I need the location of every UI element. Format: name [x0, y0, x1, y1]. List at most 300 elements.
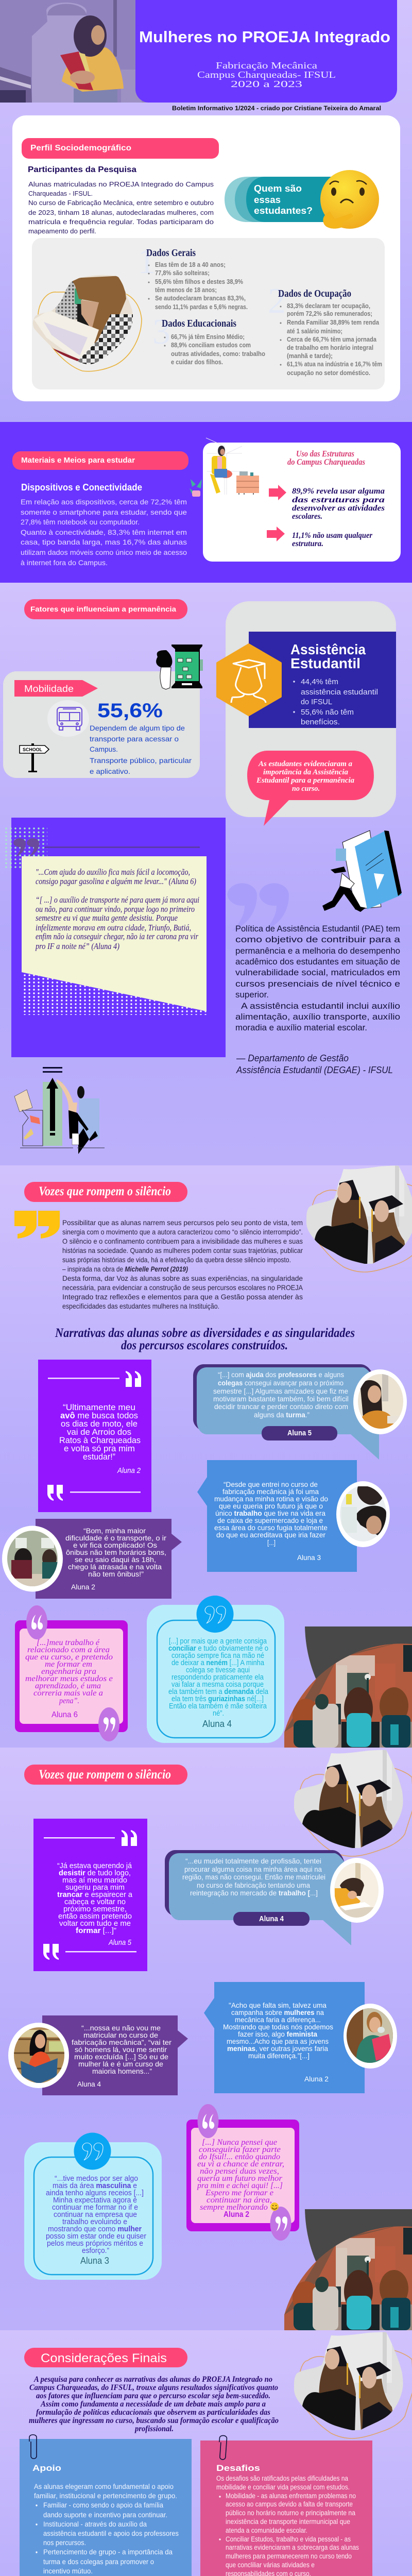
stat: uses structures: escolares.: [292, 512, 322, 521]
stat: 55,6%: 55,6%: [97, 700, 163, 722]
card: support: [20, 2435, 192, 2576]
quote card: Aluna 5 quitting: mas aí meu marido: [62, 1876, 127, 1885]
mobility text: e aplicativo.: [90, 767, 130, 775]
mobility text: Campus.: [90, 745, 118, 753]
heading: voices that break the silence: Vozes que rompem o silêncio: [39, 1184, 171, 1198]
navy panel: Estudantil: [290, 655, 360, 671]
text: conclusion: [29, 2375, 279, 2433]
quote card: Aluna 4 child care: [...] por mais que a gente consiga: [169, 1637, 267, 1646]
general data: têm menos de 18 anos;: [155, 286, 217, 294]
speech box: Aluna 3: fabricação mecânica já foi uma: [222, 1487, 319, 1496]
speech box: Aluna 3: único trabalho que tive na vida era: [215, 1509, 325, 1517]
speech bubble: Aluna 4 career: procurar alguma coisa na minha área aqui na: [184, 1865, 322, 1873]
icon: paperclip: [218, 2435, 227, 2460]
speech bubble: As estudantes evidenciaram a: [258, 760, 352, 768]
icon: bus: [47, 700, 89, 737]
heading: narratives: dos percursos escolares construídos.: [121, 1338, 288, 1352]
speech box: Aluna 3: Aluna 3: [297, 1553, 321, 1562]
speech box: Aluna 4 enrolment: mulher lá e é um curso de: [78, 2060, 163, 2068]
educational data: [162, 318, 265, 366]
icon: yellow quote mark: [14, 1211, 60, 1239]
quote card: Aluna 2 grandfather: os dias de moto, ele: [61, 1419, 138, 1429]
heading pill: Perfil Sociodemográfico: [30, 144, 131, 152]
card: use of campus structures: [203, 438, 401, 562]
text: breaking the silence: O silêncio e o confinamento contribuem para a invisibilidade das mulheres e suas: [62, 1237, 303, 1245]
speech box: Aluna 2 transport: [2, 1519, 182, 1599]
quote card: Aluna 4 child care: né”.: [213, 1709, 224, 1718]
speech box: Aluna 2 transport: Aluna 2: [71, 1583, 95, 1591]
general data: Dados Gerais: [146, 247, 196, 259]
devices text: Quanto à conectividade, 83,3% têm internet em: [21, 528, 187, 536]
card: student assistance: [217, 601, 396, 826]
general data: Se autodeclaram brancas 83,3%,: [155, 294, 246, 302]
card text: dando suporte e incentivo para continuar.: [43, 2511, 167, 2519]
card text: Familiar - como sendo o apoio da família: [43, 2501, 163, 2509]
quote card: Aluna 3 fears: “...tive medos por ser algo: [55, 2174, 138, 2183]
quote card: Aluna 3 fears: Minha expectativa agora é: [53, 2196, 137, 2205]
speech box: Aluna 3: que eu queria pro futuro já que o: [219, 1502, 323, 1510]
icon: thinking emoji: [320, 170, 379, 229]
speech bubble: Aluna 4 career: no curso de fabricação tentando uma: [197, 1881, 310, 1889]
stat: does not use: 11,1% não usam qualquer: [292, 531, 373, 540]
quote card: Aluna 2 IFSul: pra mim e achei aqui! [...]: [197, 2181, 283, 2190]
devices text: [21, 498, 187, 567]
quote card: Aluna 6: [15, 1605, 128, 1741]
icon: smiley: [270, 2202, 279, 2211]
speech box: Aluna 3: do que eu acreditava que iria fazer: [216, 1531, 325, 1539]
card text: acesso ao campus devido a falta de transporte: [226, 2500, 353, 2508]
quote card: Aluna 2 grandfather: Ratos à Charqueadas: [59, 1435, 141, 1445]
ghost numerals: 2: [268, 281, 286, 321]
speech box: Aluna 3: mudança na minha rotina e visão do: [214, 1495, 328, 1503]
quote card: Aluna 3 fears: trabalho evoluindo e: [62, 2217, 127, 2226]
stat: uses structures: desenvolver as atividades: [292, 504, 385, 513]
quote card: Aluna 6: relacionado com a área: [27, 1646, 110, 1654]
avatar photo: [330, 1858, 384, 1923]
quote card: Aluna 4 child care: ela tem três guriazinhas né[...]: [171, 1694, 264, 1703]
heading: factors: [24, 599, 187, 619]
text: breaking the silence: histórias na sociedade. Quando as mulheres podem contar suas trajetórias, publicar: [62, 1246, 303, 1255]
speech box: Aluna 2 campaign: meninas, ver outras jovens faria: [227, 2044, 328, 2053]
callout: who are these students: [225, 177, 331, 222]
attribution: — Departamento de Gestão: [236, 1053, 349, 1063]
card text: Mobilidade - as alunas enfrentam problemas no: [226, 2492, 356, 2500]
panel: materials and means: [12, 438, 401, 567]
icon: plant: [190, 479, 202, 497]
card title: do Campus Charqueadas: [287, 457, 365, 467]
quote card: Aluna 5 quitting: Aluna 5: [108, 1938, 132, 1947]
card text: nos percursos.: [43, 2538, 86, 2547]
panel: sociodemographic profile: [12, 115, 400, 401]
quote text: infelizmente morava em outra cidade, Triunfo, Butiá,: [36, 923, 191, 933]
participants text: No curso de Fabricação Mecânica, entre setembro e outubro: [28, 199, 214, 207]
quote card: Aluna 2 IFSul: não pensei duas vezes,: [200, 2167, 279, 2176]
quote card: Aluna 3 fears: [24, 2133, 162, 2280]
educational data: 66,7% já têm Ensino Médio;: [171, 333, 245, 341]
occupation data: porém 72,2% são remunerados;: [287, 310, 372, 317]
text: student assistance policy: superior.: [235, 990, 269, 999]
speech box: Aluna 4 enrolment: “...nossa eu não vou me: [81, 2024, 161, 2032]
participants text: mapeamento do perfil.: [28, 227, 96, 235]
quote card: Aluna 4 child care: Aluna 4: [202, 1719, 232, 1729]
text: student assistance policy: moradia e auxílio material escolar.: [235, 1023, 367, 1032]
devices text: utilizam dados móveis como único meio de acesso: [21, 548, 187, 556]
speech box: Aluna 2 campaign: [204, 1982, 397, 2093]
quote card: Aluna 4 child care: coração sempre fica na mão né: [171, 1651, 264, 1660]
icon: paperclip: [29, 2435, 37, 2459]
ghost numerals: [138, 242, 286, 352]
quote card: Aluna 2 IFSul: [186, 2104, 299, 2241]
educational data: outras atividades, como: trabalho: [171, 350, 265, 358]
quote text: alguns da turma.”: [254, 1411, 310, 1419]
quote card: Aluna 2 grandfather: estudar!”: [83, 1452, 115, 1462]
occupation data: Dados de Ocupação: [278, 288, 351, 299]
mobility text: Transporte público, particular: [90, 756, 192, 765]
heading: final considerations: [24, 2348, 187, 2367]
text: conclusion: Campus Charqueadas, do IFSUL, trouxe alguns resultados significativos quanto: [29, 2383, 278, 2392]
quote card: Aluna 2 grandfather: Aluna 2: [117, 1466, 141, 1475]
general data: 55,6% têm filhos e destes 38,9%: [155, 278, 243, 285]
text: breaking the silence: especificidades das estudantes mulheres na Instituição.: [62, 1302, 219, 1310]
text: conclusion: formulação de políticas educacionais que observem as particularidades das: [36, 2408, 270, 2417]
speech box: Aluna 2 transport: ônibus não tem horários bons,: [66, 1548, 166, 1556]
card text: narrativas evidenciaram a sobrecarga das alunas: [226, 2544, 359, 2551]
text: breaking the silence: Integrado traz reflexões e elementos para que a Gestão possa atender às: [62, 1293, 303, 1301]
photo: students on campus: [283, 2209, 412, 2330]
text: student assistance policy: Política de Assistência Estudantil (PAE) tem: [235, 924, 400, 934]
quote card: Aluna 3 fears: mais da área masculina e: [53, 2181, 137, 2190]
mobility text: Dependem de algum tipo de: [90, 724, 185, 732]
quote text: motivaram bastante também, foi bem difícil: [213, 1395, 349, 1403]
heading: narratives: [55, 1326, 355, 1352]
quote card: Aluna 6: me formar em: [45, 1660, 92, 1669]
occupation data: até 1 salário mínimo;: [287, 327, 342, 335]
speech box: Aluna 2 campaign: campanha sobre mulheres na: [231, 2008, 324, 2016]
quote card: Aluna 2 IFSul: queria um futuro melhor: [197, 2174, 283, 2183]
card text: Institucional - através do auxílio da: [43, 2520, 147, 2528]
card: challenges: [200, 2435, 372, 2576]
attribution: Assistência Estudantil (DEGAE) - IFSUL: [236, 1065, 393, 1075]
photo: graduates: [293, 1749, 412, 1856]
icon: hexagon with graduate: [217, 645, 281, 715]
card text: atenda a comunidade escolar.: [226, 2527, 307, 2534]
speech bubble: importância da Assistência: [263, 768, 348, 776]
quote text: [213, 1370, 349, 1419]
speech bubble: Estudantil para a permanência: [256, 776, 354, 785]
quote card: Aluna 4 child care: Então ela também é mãe solteira: [169, 1702, 267, 1710]
subtitle: Campus Charqueadas- IFSUL: [197, 70, 336, 80]
name pill: [233, 1912, 310, 1926]
avatar photo: [353, 1369, 407, 1434]
navy panel: [249, 632, 396, 728]
participants text: [28, 180, 214, 235]
card title: Uso das Estruturas: [296, 449, 354, 459]
general data: Elas têm de 18 a 40 anos;: [155, 261, 226, 268]
quote card: Aluna 4 child care: conciliar e tudo obviamente né o: [168, 1644, 268, 1653]
quote card: Aluna 2 IFSul: [...] Nunca pensei que: [202, 2138, 277, 2147]
speech box: Aluna 2 transport: “Bom, minha maior: [83, 1527, 146, 1535]
photo: graduates: [305, 1165, 412, 1272]
speech box: Aluna 2 campaign: "Acho que falta sim, talvez uma: [229, 2001, 327, 2009]
illustration: woman with giant book: [322, 831, 402, 912]
quote card: Aluna 2 IFSul: Espero me formar e: [205, 2189, 273, 2197]
illustration: woman and upward arrow: [14, 1067, 105, 1154]
participants heading: Participantes da Pesquisa: [28, 165, 136, 174]
text: breaking the silence: – inspirada na obra de Michelle Perrot (2019): [62, 1265, 188, 1273]
quote card: Aluna 2 IFSul: Aluna 2: [224, 2210, 249, 2219]
icon: school sign: SCHOOL: [23, 747, 42, 752]
card text: [34, 2482, 179, 2575]
quote card: Aluna 2 grandfather: e volta só pra mim: [64, 1444, 135, 1453]
quote card: Aluna 5 quitting: sugeriu para mim: [65, 1883, 125, 1892]
quote card: Aluna 4 child care: vai falar a mesma coisa porque: [171, 1680, 264, 1689]
devices text: somente o smartphone para estudar, sendo que: [21, 508, 187, 516]
arrow: [267, 527, 285, 541]
navy panel: assistência estudantil: [301, 688, 378, 697]
quote text: colegas consegui avançar para o próximo: [218, 1379, 344, 1387]
name pill: [262, 1426, 337, 1440]
card text: incentivo mútuo.: [43, 2567, 93, 2575]
speech box: Aluna 3: essa área do curso fugia totalmente: [214, 1523, 328, 1532]
quote card: Aluna 3 fears: esforço.”: [82, 2246, 109, 2255]
quote card: Aluna 6: pena”.: [59, 1697, 79, 1705]
subtitle: 2020 a 2023: [231, 79, 302, 89]
card heading: Apoio: [32, 2463, 61, 2473]
text: breaking the silence: suas próprias histórias de vida, há a efetivação da quebra desse silêncio imposto.: [62, 1256, 291, 1264]
attribution: [236, 1053, 393, 1075]
quote card: Aluna 6: [...]meu trabalho é: [37, 1638, 100, 1647]
card text: que concliliar várias atividades e: [226, 2561, 315, 2569]
byline: Boletim Informativo 1/2024 - criado por Cristiane Teixeira do Amaral: [172, 105, 381, 112]
quote card: Aluna 5 quitting: voltar com tudo e me: [59, 1919, 131, 1928]
stat: uses structures: das estruturas para: [292, 496, 385, 504]
card text: mobilidade e conciliar vida pessoal com estudos.: [216, 2483, 350, 2491]
quote text: ou não, para continuar vindo, porque logo no primeiro: [36, 904, 195, 914]
speech box: Aluna 2 transport: não tem ônibus!”: [88, 1570, 144, 1578]
speech box: Aluna 2 campaign: fazer isso, algo feminista: [238, 2030, 317, 2038]
title banner: [135, 0, 397, 103]
heading: voices that break the silence: [24, 1182, 187, 1202]
speech box: Aluna 3: [197, 1460, 390, 1572]
quote card: Aluna 5 quitting: [33, 1819, 147, 1971]
card title: [287, 449, 365, 467]
speech box: Aluna 2 campaign: mesmo...Acho que para as jovens: [227, 2037, 329, 2045]
title: Mulheres no PROEJA Integrado: [139, 28, 390, 46]
card text: [216, 2475, 359, 2576]
speech box: Aluna 4 enrolment: [8, 2015, 188, 2095]
heading: factors: Fatores que influenciam a permanência: [30, 605, 176, 613]
heading: voices that break the silence: Vozes que rompem o silêncio: [39, 1768, 171, 1782]
quote card: Aluna 2 grandfather: avô me busca todos: [60, 1411, 138, 1420]
quote card: Aluna 3 fears: continuar me formar no if e: [52, 2203, 138, 2212]
occupation data: Cerca de 66,7% têm uma jornada: [287, 335, 377, 343]
callout: who are these students: estudantes?: [254, 206, 313, 216]
heading: final considerations: Considerações Finais: [41, 2351, 167, 2365]
quote card: Aluna 5 quitting: “Já estava querendo já: [57, 1861, 132, 1870]
text: breaking the silence: necessária, para evidenciar a construção de seus percursos escolares no PROEJA: [62, 1283, 303, 1292]
quote card: Aluna 6: engenharia pra: [41, 1667, 96, 1676]
quote text: semestre eu vi que muita gente desistiu. Porque: [36, 913, 178, 923]
quote card: Aluna 3 fears: posso sim estar onde eu quiser: [46, 2232, 146, 2241]
card text: As alunas elegeram como fundamental o apoio: [34, 2482, 174, 2490]
card: mobility: [3, 671, 200, 778]
speech box: Aluna 2 transport: se eu saio daqui às 18h,: [75, 1555, 156, 1564]
devices text: 27,8% têm notebook ou computador.: [21, 518, 140, 526]
quote text: “[...] com ajuda dos professores e alguns: [218, 1370, 344, 1379]
text: breaking the silence: [62, 1218, 303, 1310]
devices text: casa, tipo banda larga, mas 16,7% das alunas: [21, 538, 187, 546]
educational data: Dados Educacionais: [162, 318, 236, 329]
quote text: “[ ...] o auxílio de transporte né para quem já mora aqui: [36, 895, 199, 905]
quote card: Aluna 4 child care: [147, 1596, 284, 1743]
quote card: Aluna 6: correria mais vale a: [33, 1689, 103, 1698]
card text: Os desafios são ratificados pelas dificuldades na: [216, 2475, 348, 2482]
speech bubble: Aluna 4 career: [165, 1850, 384, 1945]
quote card: Aluna 4 child care: ela também tem a demanda dela: [168, 1687, 269, 1696]
quote card: Aluna 4 child care: de deixar a neném [...] A minha: [171, 1658, 265, 1667]
stat: does not use: [292, 531, 373, 548]
quote card: Aluna 2 grandfather: vai de Arroio dos: [67, 1427, 131, 1437]
devices text: à internet fora do Campus.: [21, 558, 108, 567]
speech bubble: Aluna 4 career: reintegração no mercado de trabalho [...]: [190, 1889, 318, 1897]
text: conclusion: Assim como fundamenta a necessidade de um debate mais amplo para a: [40, 2400, 266, 2409]
speech bubble: no curso.: [292, 785, 320, 793]
speech box: Aluna 4 enrolment: muito excluída [...] Só eu de: [74, 2053, 168, 2061]
speech box: Aluna 2 campaign: mecânica faria a diferença...: [235, 2015, 321, 2024]
avatar photo: [344, 2004, 397, 2069]
stat: does not use: estrutura.: [292, 539, 323, 548]
quote card: Aluna 5 quitting: então assim pretendo: [58, 1912, 132, 1921]
speech box: Aluna 2 campaign: Aluna 2: [304, 2075, 329, 2083]
participants text: matrícula e frequência regular. Todas participaram do: [28, 218, 214, 226]
photo: graduates: [293, 2331, 412, 2438]
text: student assistance policy: permanência e a melhoria do desempenho: [235, 946, 400, 956]
text: student assistance policy: vulnerabilidade social, matriculados em: [235, 968, 400, 977]
occupation data: 61,1% atua na indústria e 16,7% têm: [287, 360, 382, 368]
quote card: Aluna 6: melhorar meus estudos e: [25, 1674, 113, 1683]
text: breaking the silence: Possibilitar que as alunas narrem seus percursos pelo seu ponto de vista, tem: [62, 1218, 303, 1227]
general data: 77,8% são solteiras;: [155, 269, 210, 277]
card text: familiar, institucional e pertencimento de grupo.: [34, 2492, 177, 2500]
quote card: Aluna 3 fears: Aluna 3: [80, 2256, 109, 2266]
arrow: [269, 485, 286, 500]
speech bubble: Aluna 5: [193, 1364, 407, 1460]
text: breaking the silence: Desta forma, dar Voz às alunas sobre as suas experiências, na singularidade: [62, 1274, 303, 1282]
text: student assistance policy: cursos presenciais de nível técnico e: [235, 979, 400, 989]
speech box: Aluna 3: [...]: [267, 1538, 276, 1547]
quote text: "...Com ajuda do auxílio fica mais fácil a locomoção,: [36, 867, 190, 877]
photo: student reading: [31, 273, 142, 371]
icon: school sign: [20, 743, 49, 772]
speech box: Aluna 2 campaign: muita diferença.”[...]: [248, 2052, 310, 2060]
quote card: Aluna 3 fears: ainda tenho alguns receios [...]: [46, 2189, 144, 2197]
quote card: Aluna 2 IFSul: continuar na área,: [207, 2196, 272, 2205]
panel: student quotes on transport: [5, 818, 226, 1057]
speech box: Aluna 4 enrolment: só homens lá, vou me sentir: [75, 2045, 167, 2054]
subtitle: [197, 60, 336, 89]
ghost numerals: 1: [138, 242, 156, 281]
quote card: Aluna 6: aprendizado, é uma: [35, 1682, 101, 1690]
stat: uses structures: 89,9% revela usar alguma: [292, 487, 385, 496]
heading: narratives: Narrativas das alunas sobre as diversidades e as singularidades: [55, 1326, 355, 1340]
navy panel: Assistência: [290, 641, 366, 657]
speech bubble: Aluna 4 career: “...eu mudei totalmente de profissão, tentei: [185, 1857, 321, 1865]
occupation data: de trabalho em horário integral: [287, 344, 373, 351]
navy panel: do IFSUL: [301, 698, 332, 706]
card text: inexistência de transporte intermunicipal que: [226, 2518, 350, 2526]
speech box: Aluna 2 transport: e vir fica complicado! Os: [73, 1541, 157, 1549]
occupation data: [278, 288, 382, 377]
quote card: Aluna 2 grandfather: [38, 1360, 151, 1512]
speech box: Aluna 2 transport: dificuldade é o transporte, o ir: [65, 1534, 166, 1542]
card text: público no horário noturno e principalmente na: [226, 2509, 355, 2517]
text: conclusion: A pesquisa para conhecer as narrativas das alunas do PROEJA Integrado no: [33, 2375, 272, 2384]
navy panel: benefícios.: [301, 718, 340, 726]
quote text: semestre [...] Algumas amizades que fiz me: [213, 1387, 348, 1395]
quote card: Aluna 4 child care: colega se tivesse aqui: [186, 1666, 250, 1674]
speech box: Aluna 3: “Desde que entrei no curso de: [224, 1480, 318, 1488]
speech bubble: [247, 751, 374, 826]
general data: sendo 11,1% pardas e 5,6% negras.: [155, 303, 248, 311]
quote card: Aluna 3 fears: mostrando que como mulher: [48, 2225, 142, 2233]
speech box: Aluna 2 transport: chego lá atrasada e na volta: [68, 1563, 162, 1571]
text: student assistance policy: como objetivo de contribuir para a: [235, 935, 401, 944]
participants text: Alunas matriculadas no PROEJA Integrado do Campus: [28, 180, 214, 188]
photo: students on campus: [283, 1626, 412, 1748]
quote text: consigo pagar gasolina e alguém me levar..." (Aluna 6): [36, 876, 196, 886]
quote card: Aluna 5 quitting: trancar e espairecer a: [57, 1890, 133, 1899]
illustration: woman and app phone: [156, 645, 203, 689]
occupation data: (manhã e tarde);: [287, 352, 333, 360]
tag: Mobilidade: [24, 684, 74, 694]
text: student assistance policy: alimentação, auxílio transporte, auxílio: [235, 1012, 400, 1022]
quote card: Aluna 2 IFSul: do Ifsul!... então quando: [199, 2153, 280, 2161]
quote card: Aluna 5 quitting: próximo semestre,: [63, 1905, 127, 1913]
speech box: Aluna 4 enrolment: Aluna 4: [77, 2080, 101, 2088]
quote card: Aluna 6: que eu curso, e pretendo: [25, 1653, 113, 1662]
navy panel: 44,4% têm: [301, 677, 338, 686]
quote card: Aluna 2 IFSul: eu vi a chance de entrar,: [197, 2160, 284, 2168]
panel: general data: [31, 238, 385, 389]
quote card: Aluna 5 quitting: cabeça e voltar no: [64, 1897, 126, 1906]
speech bubble: Aluna 4 career: região, mas não consegui. Então me matriculei: [182, 1873, 325, 1881]
navy panel: 55,6% não têm: [301, 708, 354, 717]
mobility text: transporte para acessar o: [90, 735, 179, 743]
callout: who are these students: essas: [254, 195, 281, 205]
educational data: 88,9% conciliam estudos com: [171, 341, 251, 349]
text: student assistance policy: [235, 924, 401, 1032]
quote text: [35, 867, 199, 951]
card heading: Desafios: [216, 2463, 260, 2473]
ghost numerals: 3: [152, 312, 170, 352]
occupation data: 83,3% declaram ter ocupação,: [287, 302, 370, 310]
stat: uses structures: [292, 487, 385, 521]
text: conclusion: aos fatores que influenciam para que o percurso escolar seja bem-sucedido.: [36, 2392, 270, 2400]
quote card: Aluna 3 fears: continuar na empresa que: [54, 2210, 137, 2219]
heading pill: [12, 451, 188, 470]
illustration: woman with laptop: [206, 438, 259, 495]
devices text: Em relação aos dispositivos, cerca de 72,2% têm: [21, 498, 187, 506]
speech box: Aluna 4 enrolment: fabricação mecânica”, “vai ter: [72, 2038, 171, 2046]
name pill: Aluna 5: [287, 1429, 312, 1437]
avatar photo: [336, 1481, 390, 1547]
speech box: Aluna 4 enrolment: matricular no curso de: [83, 2031, 158, 2039]
speech box: Aluna 2 campaign: Mostrando que todas nós podemos: [223, 2023, 333, 2031]
quote card: Aluna 5 quitting: desistir de tudo logo,: [59, 1869, 131, 1877]
card text: assistência estudantil e apoio dos professores: [43, 2529, 179, 2537]
heading pill: Materiais e Meios para estudar: [21, 456, 135, 465]
text: student assistance policy: A assistência estudantil inclui auxílio: [241, 1001, 400, 1011]
